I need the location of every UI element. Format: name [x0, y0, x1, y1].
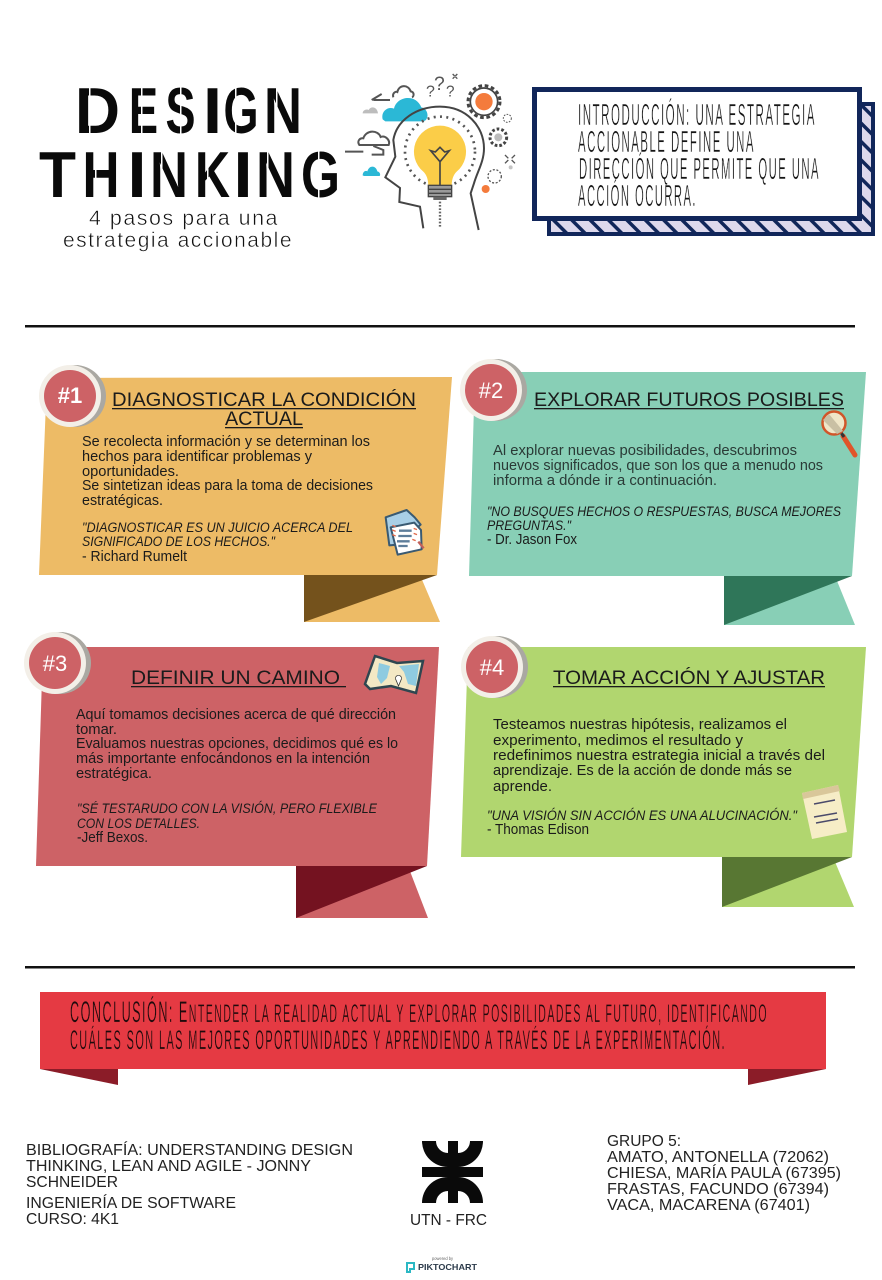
quote 3: "SÉ TESTARUDO CON LA VISIÓN, PERO FLEXIBLE [77, 800, 377, 817]
body text 4: Testeamos nuestras hipótesis, realizamos el [493, 717, 787, 733]
group members: FRASTAS, FACUNDO (67394) [607, 1181, 829, 1198]
title: Design Thinking: I [128, 138, 146, 211]
badge 3 [24, 632, 91, 694]
bibliography block: BIBLIOGRAFÍA: UNDERSTANDING DESIGN [26, 1140, 353, 1159]
bibliography block: INGENIERÍA DE SOFTWARE [26, 1193, 236, 1212]
title: Design Thinking: N [264, 74, 302, 147]
body text 4: aprendizaje. Es de la acción de donde más se [493, 763, 792, 779]
icon: clouds [345, 86, 428, 176]
title: Design Thinking: N [150, 138, 188, 211]
body text 3 [76, 707, 398, 782]
body text 4 [493, 717, 825, 795]
body text 2 [493, 443, 823, 489]
quote 4 [487, 807, 798, 838]
body text 4: experimento, medimos el resultado y [493, 733, 744, 749]
body text 2: Al explorar nuevas posibilidades, descubrimos [493, 443, 797, 459]
group members: VACA, MACARENA (67401) [607, 1197, 810, 1214]
quote 1: "DIAGNOSTICAR ES UN JUICIO ACERCA DEL [82, 520, 353, 536]
icon: gears [453, 74, 515, 193]
body text 4: aprende. [493, 779, 552, 795]
body text 1: Se sintetizan ideas para la toma de decisiones [82, 478, 373, 494]
body text 1: estratégicas. [82, 493, 163, 509]
heading 1: ACTUAL [225, 408, 303, 430]
title: Design Thinking: H [82, 138, 120, 211]
quote 2: "NO BUSQUES HECHOS O RESPUESTAS, BUSCA MEJORES [487, 504, 841, 520]
heading 1: DIAGNOSTICAR LA CONDICIÓN [112, 388, 416, 411]
quote 2: PREGUNTAS." [487, 518, 572, 534]
piktochart footer mark: PIKTOCHART [418, 1262, 478, 1272]
heading 3: DEFINIR UN CAMINO [131, 667, 340, 689]
title: Design Thinking: K [195, 138, 230, 211]
icon: map [365, 656, 423, 693]
piktochart footer mark [407, 1256, 478, 1272]
badge 1 [39, 365, 106, 427]
body text 3: Aquí tomamos decisiones acerca de qué dirección [76, 707, 396, 723]
question marks: ? [446, 84, 455, 101]
icon: magnifier [822, 412, 855, 455]
question marks: ? [426, 84, 435, 101]
panel: step 2 [460, 359, 866, 625]
subtitle: estrategia accionable [63, 229, 293, 252]
icon: documents [386, 510, 424, 555]
heading 2: EXPLORAR FUTUROS POSIBLES [534, 389, 844, 411]
panel: conclusion banner [40, 992, 826, 1085]
icon: UTN logo [422, 1141, 483, 1203]
bibliography block [26, 1140, 353, 1228]
body text 3: más importante enfocándonos en la intención [76, 751, 370, 767]
badge 4 [461, 636, 528, 698]
title: Design Thinking: D [75, 74, 120, 147]
body text 1: hechos para identificar problemas y [82, 449, 313, 465]
title: Design Thinking: S [166, 74, 196, 147]
subtitle: 4 pasos para una [89, 207, 279, 230]
group members: CHIESA, MARÍA PAULA (67395) [607, 1163, 841, 1182]
quote 4: - Thomas Edison [487, 822, 589, 838]
bibliography block: CURSO: 4K1 [26, 1211, 119, 1228]
icon: head with light bulb [345, 74, 515, 230]
group members: AMATO, ANTONELLA (72062) [607, 1149, 829, 1166]
quote 3: -Jeff Bexos. [77, 830, 148, 846]
body text 1: oportunidades. [82, 464, 179, 480]
body text 1: Se recolecta información y se determinan los [82, 434, 370, 450]
quote 2 [487, 504, 841, 548]
body text 2: informa a dónde ir a continuación. [493, 473, 717, 489]
group members: GRUPO 5: [607, 1133, 681, 1150]
title: Design Thinking: N [256, 138, 295, 211]
body text 3: tomar. [76, 722, 117, 738]
bibliography block: SCHNEIDER [26, 1174, 118, 1191]
badge 2: #2 [479, 378, 503, 403]
title: Design Thinking: I [203, 74, 222, 147]
subtitle [63, 207, 293, 252]
title: Design Thinking: E [129, 74, 158, 147]
logo caption: UTN - FRC [410, 1212, 487, 1229]
panel: step 1 [39, 365, 452, 622]
quote 2: - Dr. Jason Fox [487, 532, 578, 548]
conclusion text [70, 996, 768, 1055]
heading 1 [112, 388, 416, 430]
body text 3: estratégica. [76, 766, 152, 782]
quote 1: - Richard Rumelt [82, 549, 187, 565]
body text 3: Evaluamos nuestras opciones, decidimos qué es lo [76, 736, 398, 752]
bibliography block: THINKING, LEAN AND AGILE - JONNY [26, 1158, 311, 1175]
question marks: ? [434, 74, 445, 95]
introduction text [578, 97, 820, 213]
title: Design Thinking: G [224, 74, 258, 147]
panel: step 3 [24, 632, 439, 918]
badge 2 [460, 359, 527, 421]
body text 1 [82, 434, 373, 509]
panel: introduction box [534, 90, 875, 236]
heading 4: TOMAR ACCIÓN Y AJUSTAR [553, 666, 825, 689]
head outline [385, 107, 484, 230]
question marks [426, 74, 455, 101]
group members [607, 1133, 841, 1214]
title: Design Thinking [39, 74, 340, 211]
badge 4: #4 [480, 655, 504, 680]
quote 3: CON LOS DETALLES. [77, 816, 200, 832]
title: Design Thinking: T [39, 138, 76, 211]
body text 2: nuevos significados, que son los que a menudo nos [493, 458, 823, 474]
quote 1 [82, 520, 353, 565]
light bulb [405, 117, 475, 228]
title: Design Thinking: G [301, 138, 340, 211]
quote 3 [77, 800, 377, 846]
title: Design Thinking: I [234, 138, 252, 211]
panel: step 4 [461, 636, 866, 907]
quote 1: SIGNIFICADO DE LOS HECHOS." [82, 534, 276, 550]
badge 3: #3 [43, 651, 67, 676]
piktochart footer mark: powered by [432, 1256, 454, 1261]
body text 4: redefinimos nuestra estrategia inicial a través del [493, 748, 825, 764]
quote 4: "UNA VISIÓN SIN ACCIÓN ES UNA ALUCINACIÓN." [487, 807, 798, 824]
badge 1: #1 [58, 383, 82, 408]
icon: notepad [802, 785, 847, 839]
